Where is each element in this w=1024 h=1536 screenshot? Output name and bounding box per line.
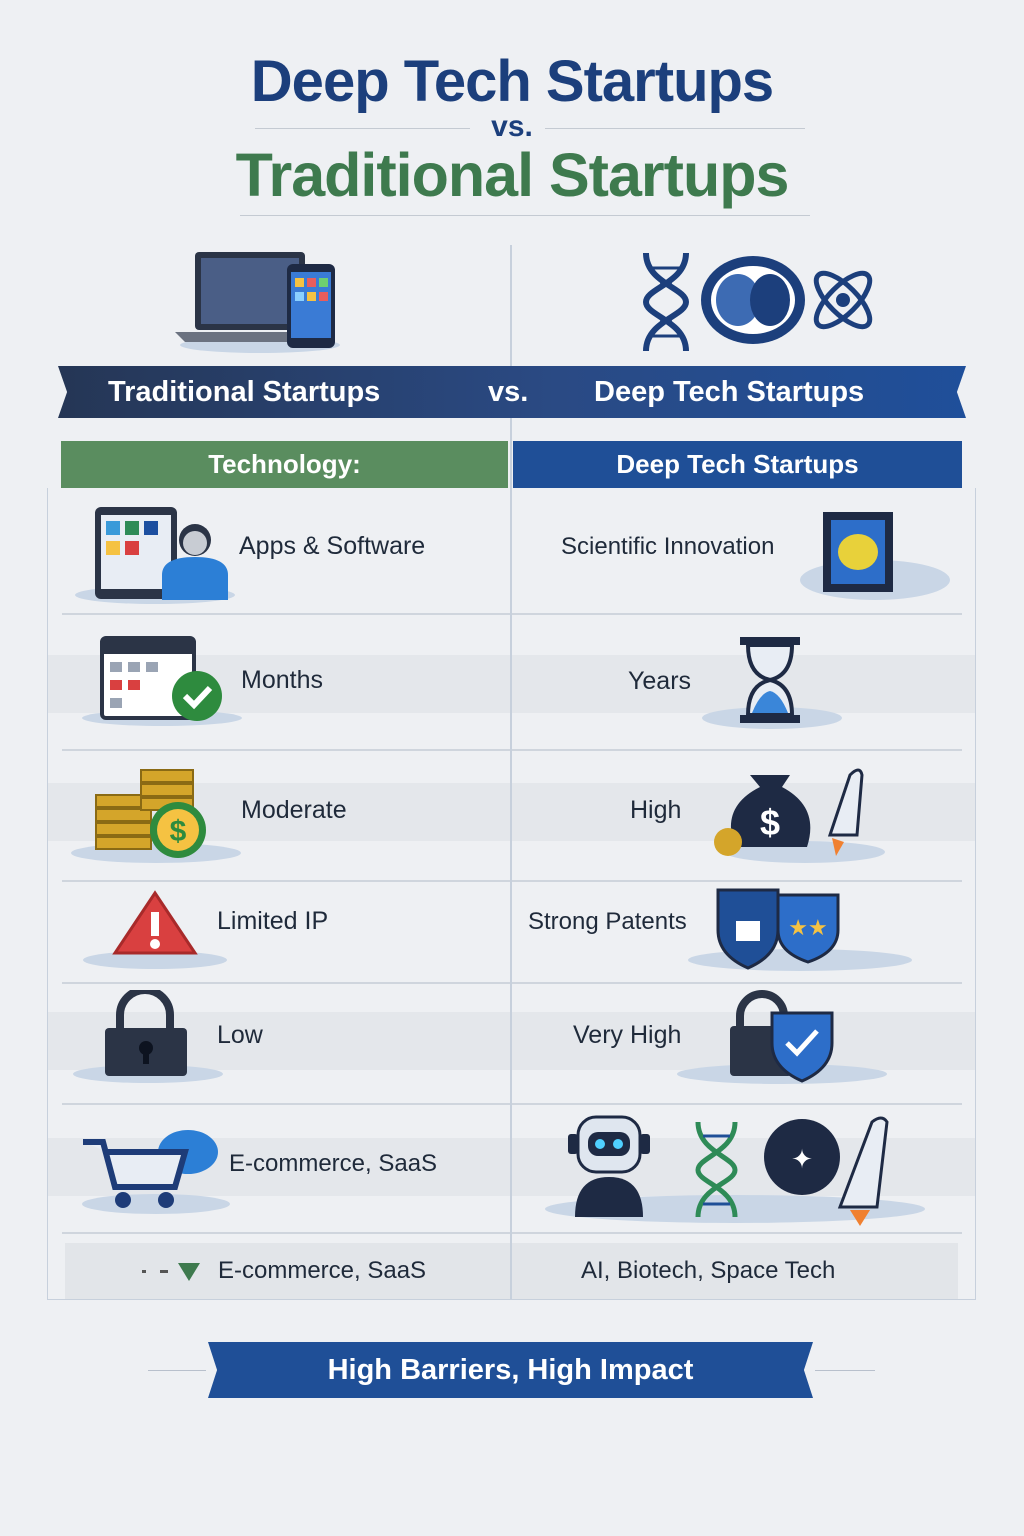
icon: dna brain atom	[643, 253, 872, 351]
text: ✦	[791, 1144, 813, 1174]
title	[236, 49, 788, 209]
title: Deep Tech Startups	[251, 49, 773, 114]
text: AI, Biotech, Space Tech	[581, 1257, 835, 1284]
row 6	[82, 1130, 230, 1214]
row 2	[82, 636, 242, 726]
title: vs.	[491, 110, 533, 143]
text: Low	[217, 1021, 263, 1049]
footer banner	[208, 1342, 813, 1398]
banner: traditional vs deep tech: Traditional Startups	[108, 376, 380, 408]
banner: traditional vs deep tech	[58, 366, 966, 418]
row 1	[75, 507, 235, 604]
footer banner: High Barriers, High Impact	[328, 1354, 693, 1386]
vertical divider	[510, 245, 512, 1300]
text: Apps & Software	[239, 532, 425, 560]
text: Very High	[573, 1021, 681, 1049]
text: E-commerce, SaaS	[229, 1150, 437, 1177]
icon: laptop and phone	[175, 252, 340, 353]
text: E-commerce, SaaS	[218, 1257, 426, 1284]
text: Months	[241, 666, 323, 694]
row 3	[71, 769, 241, 863]
text: Years	[628, 667, 691, 695]
header: deep tech: Deep Tech Startups	[616, 449, 859, 479]
row 3: $	[170, 815, 187, 848]
row 7	[142, 1263, 200, 1281]
table frame	[47, 488, 976, 1300]
text: Strong Patents	[528, 908, 687, 935]
header: deep tech	[513, 441, 962, 488]
banner: traditional vs deep tech: Deep Tech Startups	[594, 376, 864, 408]
header: technology: Technology:	[208, 449, 361, 479]
banner: traditional vs deep tech: vs.	[488, 376, 528, 408]
title: Traditional Startups	[236, 141, 788, 209]
text: Scientific Innovation	[561, 533, 774, 560]
text: Limited IP	[217, 907, 328, 935]
row 5	[73, 990, 223, 1083]
row 4	[83, 890, 227, 969]
text: Moderate	[241, 796, 347, 824]
header: technology	[61, 441, 508, 488]
text: High	[630, 796, 681, 824]
text: ★★	[788, 915, 828, 940]
text: $	[760, 802, 780, 843]
